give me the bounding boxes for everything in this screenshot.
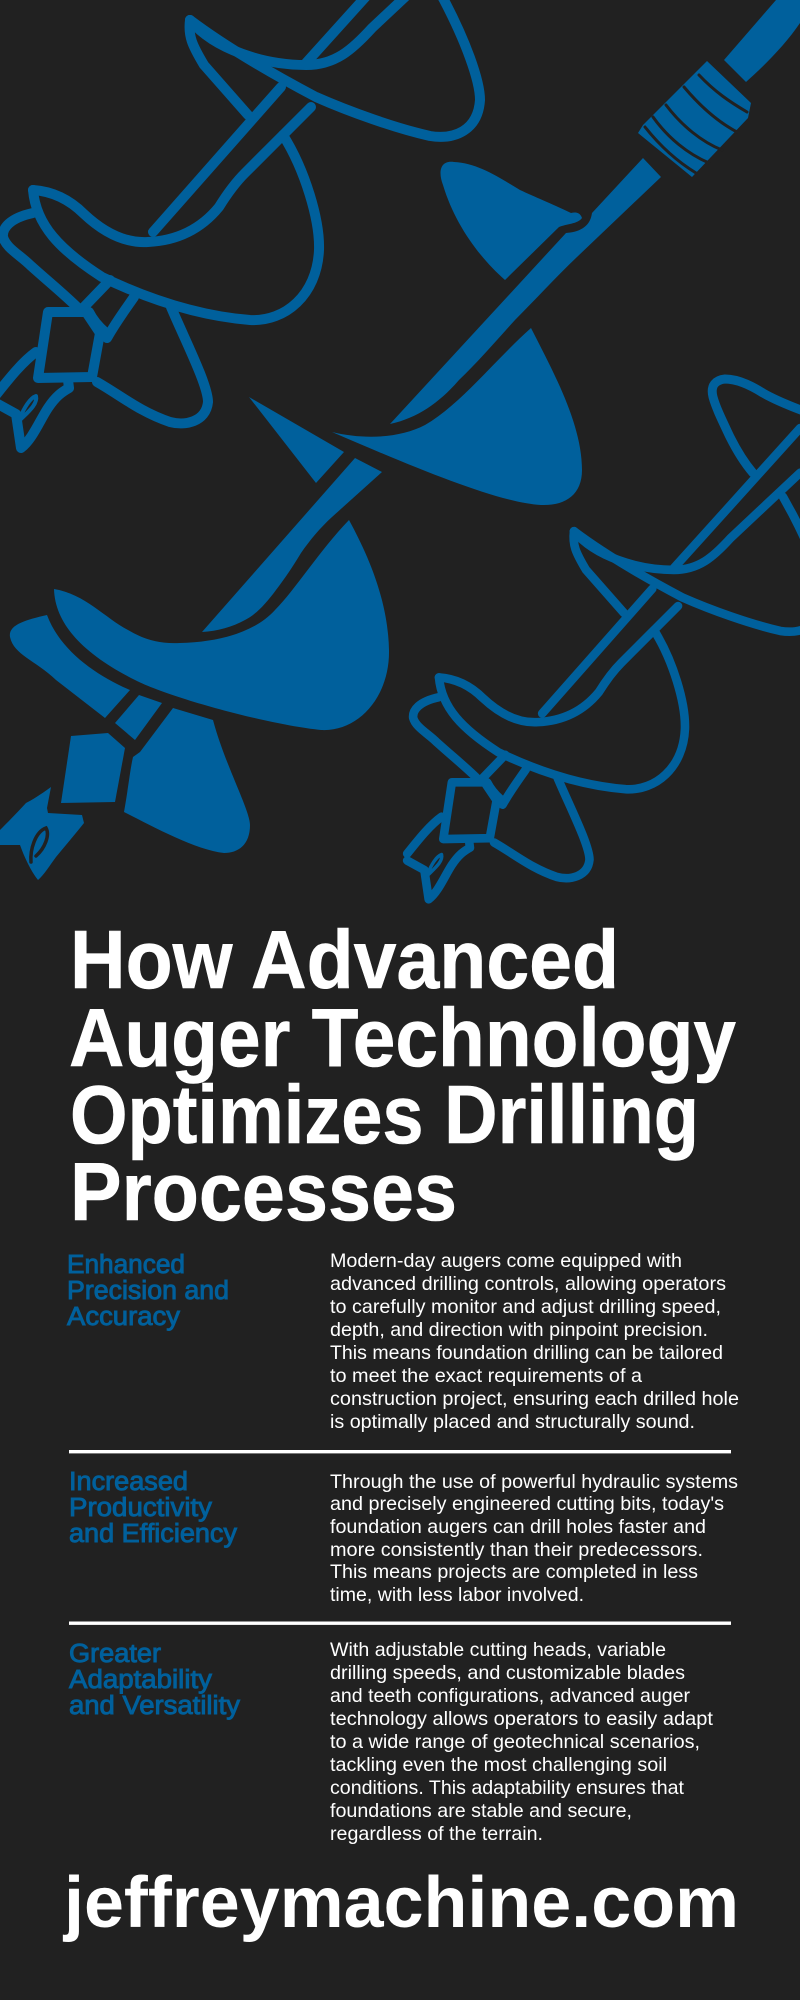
body text: and teeth configurations, advanced auger xyxy=(330,1685,690,1707)
heading: Increased xyxy=(69,1468,188,1496)
section: greater adaptability and versatility xyxy=(69,1639,714,1845)
heading: and Efficiency xyxy=(69,1520,237,1548)
body text xyxy=(330,1471,738,1606)
title: Auger Technology xyxy=(69,991,736,1084)
heading: Enhanced xyxy=(67,1251,185,1279)
body text: technology allows operators to easily adapt xyxy=(330,1708,714,1730)
heading xyxy=(67,1251,229,1331)
heading: Precision and xyxy=(67,1277,229,1305)
heading: Accuracy xyxy=(67,1303,180,1331)
heading: and Versatility xyxy=(69,1692,240,1720)
body text: Through the use of powerful hydraulic systems xyxy=(330,1471,738,1493)
body text: drilling speeds, and customizable blades xyxy=(330,1662,685,1684)
body text: Modern-day augers come equipped with xyxy=(330,1250,682,1272)
illustration: auger drill bits xyxy=(0,0,800,899)
body text: and precisely engineered cutting bits, today's xyxy=(330,1493,724,1515)
body text: more consistently than their predecessors. xyxy=(330,1539,703,1561)
body text: This means foundation drilling can be tailored xyxy=(330,1342,723,1364)
bottom flight xyxy=(124,708,250,853)
section: increased productivity and efficiency xyxy=(69,1468,738,1606)
body text: foundations are stable and secure, xyxy=(330,1800,632,1822)
title xyxy=(69,913,736,1238)
section: enhanced precision and accuracy xyxy=(67,1250,739,1433)
collar xyxy=(61,733,125,803)
icon: outlined auger, upper left xyxy=(0,0,480,448)
heading xyxy=(69,1468,237,1548)
title: Processes xyxy=(70,1145,457,1238)
small upper flight xyxy=(441,162,582,280)
auger body xyxy=(407,428,800,899)
body text: to a wide range of geotechnical scenarios, xyxy=(330,1731,700,1753)
footer: website: jeffreymachine.com xyxy=(62,1863,739,1943)
body text: regardless of the terrain. xyxy=(330,1823,543,1845)
body text: foundation augers can drill holes faster and xyxy=(330,1516,706,1538)
long shaft xyxy=(390,158,661,424)
left wedge xyxy=(249,397,344,483)
body text: advanced drilling controls, allowing operators xyxy=(330,1273,726,1295)
body text: conditions. This adaptability ensures that xyxy=(330,1777,685,1799)
body text: time, with less labor involved. xyxy=(330,1584,584,1606)
drill tip slot xyxy=(31,828,47,862)
drill tip xyxy=(0,787,84,880)
body text: tackling even the most challenging soil xyxy=(330,1754,667,1776)
title: How Advanced xyxy=(70,913,619,1006)
auger handle xyxy=(724,0,800,82)
body text: depth, and direction with pinpoint precision. xyxy=(330,1319,708,1341)
large lower flight xyxy=(54,520,389,730)
body text xyxy=(330,1639,714,1845)
lower shaft piece xyxy=(115,695,162,740)
heading: Productivity xyxy=(69,1494,212,1522)
body text: This means projects are completed in less xyxy=(330,1561,698,1583)
handle wrap xyxy=(638,61,751,177)
top flight at right edge xyxy=(712,379,800,473)
icon: solid auger, centre diagonal xyxy=(0,0,800,880)
body text: to carefully monitor and adjust drilling speed, xyxy=(330,1296,721,1318)
heading: Adaptability xyxy=(69,1666,212,1694)
title: Optimizes Drilling xyxy=(70,1068,699,1161)
large upper flight xyxy=(332,328,582,505)
mid shaft xyxy=(202,458,382,632)
body text xyxy=(330,1250,739,1433)
back flight xyxy=(10,615,130,718)
body text: is optimally placed and structurally sound. xyxy=(330,1411,695,1433)
heading: Greater xyxy=(69,1640,162,1668)
heading xyxy=(69,1640,240,1720)
body text: construction project, ensuring each drilled hole xyxy=(330,1388,739,1410)
body text: to meet the exact requirements of a xyxy=(330,1365,642,1387)
body text: With adjustable cutting heads, variable xyxy=(330,1639,666,1661)
icon: outlined auger, lower right xyxy=(407,379,800,899)
